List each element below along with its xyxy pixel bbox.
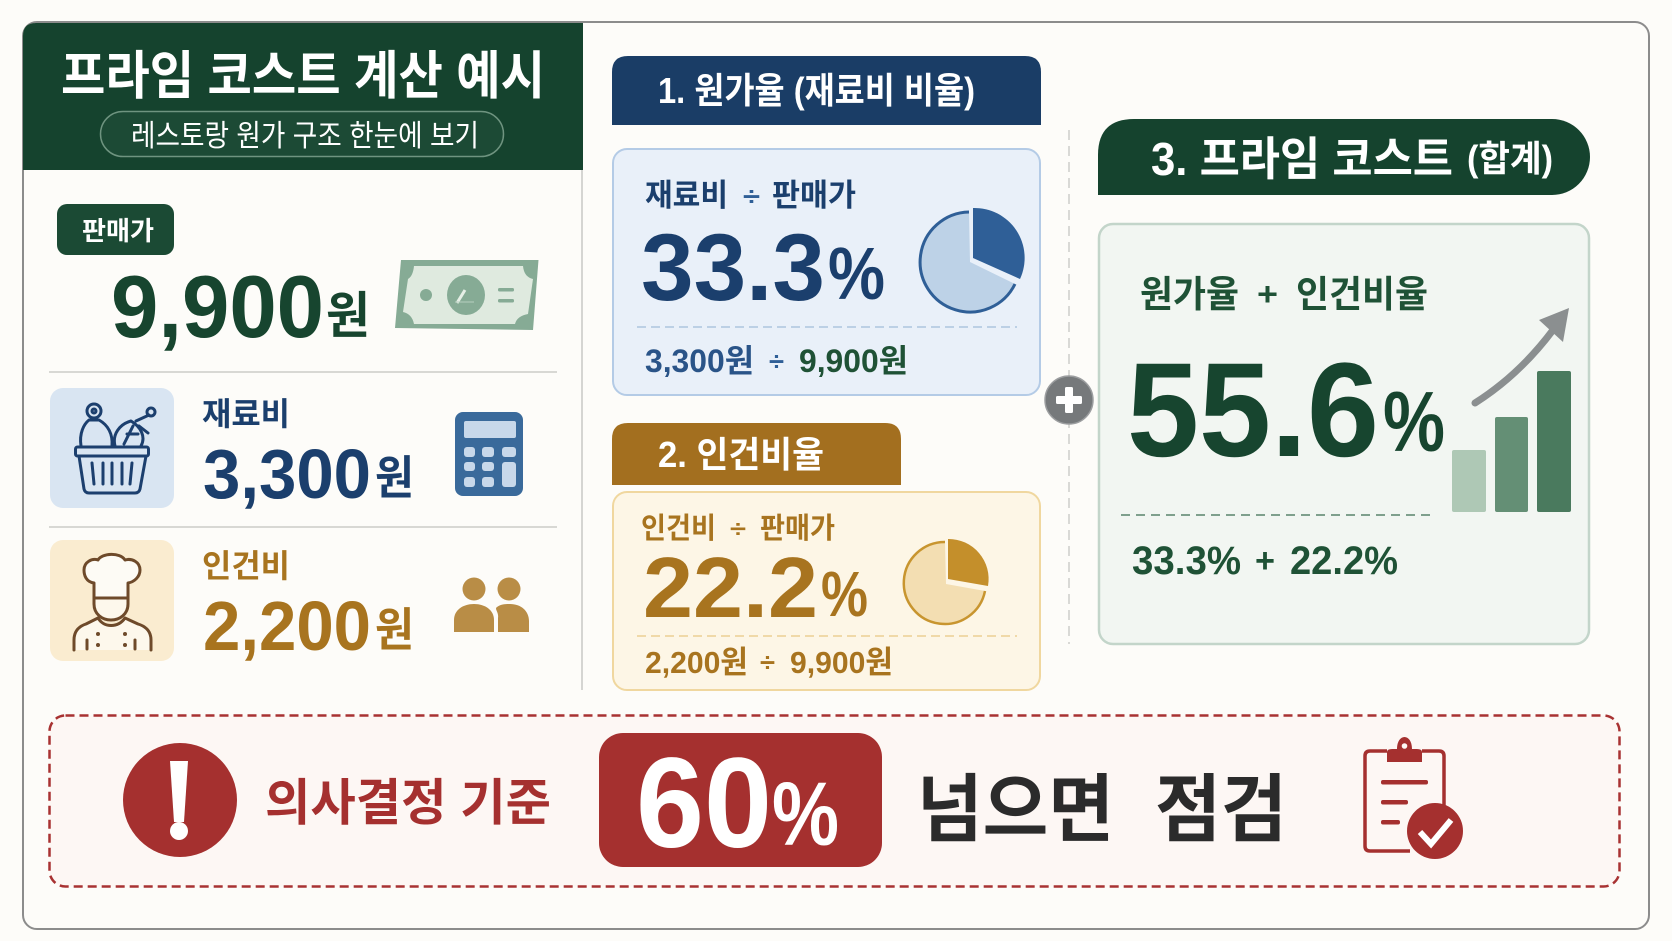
formula label: 원가율 <box>1140 274 1239 315</box>
formula values <box>645 343 908 379</box>
formula label: 판매가 <box>760 512 835 545</box>
heading: prime cost: 3. 프라임 코스트 <box>1151 133 1453 185</box>
heading: prime cost <box>1098 119 1590 195</box>
pie chart: 33.3% <box>920 208 1025 312</box>
card: labor ratio <box>613 492 1040 690</box>
icon: calculator <box>455 412 523 496</box>
value: 22.2%: % <box>821 558 868 630</box>
formula values: 33.3% <box>1132 539 1241 583</box>
heading: cost ratio <box>612 56 1041 125</box>
formula values <box>645 645 893 680</box>
callout: decision threshold <box>50 716 1620 886</box>
label: decision criterion: 의사결정 기준 <box>265 775 551 831</box>
value: labor cost: 2,200 <box>203 587 371 665</box>
formula values: ÷ <box>760 647 775 677</box>
value: 22.2%: 22.2 <box>643 541 818 636</box>
formula label: 인건비율 <box>1296 274 1428 315</box>
icon: plus <box>1045 376 1093 424</box>
panel: labor ratio <box>612 423 1040 690</box>
formula label: ÷ <box>730 516 746 543</box>
icon: people <box>454 578 529 632</box>
pie chart: 22.2% <box>904 539 989 624</box>
formula values: 9,900원 <box>799 343 908 379</box>
formula label: 재료비 <box>645 178 728 213</box>
formula values: ÷ <box>769 346 784 376</box>
label: check if exceeded <box>917 768 1287 851</box>
badge: 60%: 60 <box>636 732 772 875</box>
heading: prime cost: (합계) <box>1467 138 1553 179</box>
icon: clipboard check <box>1365 737 1463 859</box>
formula label: 판매가 <box>772 178 856 213</box>
value: 33.3%: % <box>828 232 885 315</box>
bar chart: rising <box>1452 371 1571 512</box>
value: 55.6%: % <box>1383 375 1445 470</box>
formula values: 3,300원 <box>645 343 754 379</box>
icon: grocery basket <box>50 388 174 508</box>
formula label <box>1140 274 1428 315</box>
value: 33.3%: 33.3 <box>641 215 825 321</box>
subtitle pill <box>100 112 504 156</box>
formula values <box>1132 539 1398 583</box>
formula label <box>645 178 856 213</box>
label: check if exceeded: 점검 <box>1155 768 1287 851</box>
value: ingredient cost: 3,300 <box>203 435 371 513</box>
label: ingredient cost: 재료비 <box>202 396 290 432</box>
heading: labor ratio <box>612 423 901 485</box>
formula label: + <box>1257 276 1278 312</box>
formula values: 2,200원 <box>645 645 748 680</box>
vertical divider <box>581 170 583 690</box>
value: selling price: 원 <box>326 288 370 344</box>
row: labor cost <box>50 540 529 665</box>
panel: prime cost <box>1098 119 1590 644</box>
tag: selling price <box>57 204 174 255</box>
formula label <box>641 512 835 545</box>
subtitle pill: 레스토랑 원가 구조 한눈에 보기 <box>131 120 479 153</box>
icon: alert <box>123 743 237 857</box>
value: labor cost: 원 <box>375 604 414 656</box>
value: 55.6%: 55.6 <box>1127 336 1379 485</box>
formula label: 인건비 <box>641 512 716 545</box>
formula values: + <box>1255 542 1275 580</box>
tag: selling price: 판매가 <box>82 216 154 246</box>
label: check if exceeded: 넘으면 <box>917 768 1114 851</box>
heading: cost ratio: 1. 원가율 (재료비 비율) <box>658 70 975 111</box>
panel: inputs <box>23 23 583 690</box>
formula values: 22.2% <box>1290 539 1398 583</box>
icon: banknote <box>395 260 538 330</box>
heading: labor ratio: 2. 인건비율 <box>658 434 824 475</box>
badge: 60%: % <box>772 765 839 865</box>
header: title block <box>23 23 583 170</box>
card: cost ratio <box>613 149 1040 395</box>
badge: 60% <box>599 732 882 875</box>
title: 프라임 코스트 계산 예시 <box>61 48 545 106</box>
value: ingredient cost: 원 <box>375 452 414 504</box>
row: ingredient cost <box>50 388 523 513</box>
label: labor cost: 인건비 <box>202 548 290 584</box>
card: prime cost <box>1099 224 1589 644</box>
value: selling price: 9,900 <box>111 257 324 356</box>
arrow: upward trend <box>1475 308 1569 403</box>
icon: chef <box>50 540 174 661</box>
formula values: 9,900원 <box>790 645 893 680</box>
formula label: ÷ <box>743 181 760 211</box>
panel: cost ratio <box>612 56 1041 395</box>
